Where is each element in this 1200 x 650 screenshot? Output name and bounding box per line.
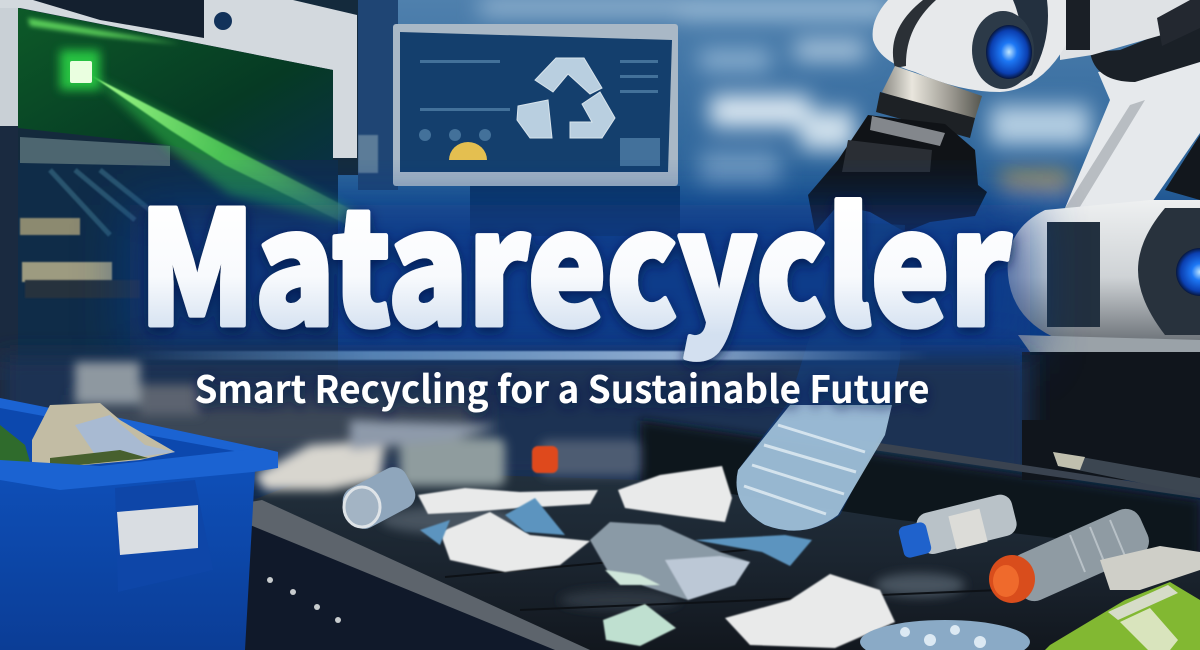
conveyor rail: [250, 500, 590, 650]
icon: green laser beam: [60, 50, 362, 228]
neck: [882, 66, 982, 128]
waste in bin: [0, 403, 175, 468]
laser machine: [0, 0, 398, 401]
wrist shell: [873, 0, 1066, 92]
blurred orange bottle cap: [532, 446, 558, 473]
held plastic bottle: [737, 222, 905, 531]
blurred background debris: [75, 362, 640, 490]
bin label: [117, 505, 198, 555]
conveyor side panel: [240, 515, 570, 650]
elbow: [1090, 18, 1200, 82]
belt reflections: [380, 506, 965, 610]
platform: [1018, 335, 1200, 358]
bin front rim: [0, 448, 278, 490]
recycling bin: [0, 398, 278, 650]
machine slot: [33, 0, 204, 38]
conveyor belt: [0, 355, 1200, 650]
machine knob: [214, 12, 232, 30]
upper arm: [1060, 0, 1200, 60]
joint: [1008, 200, 1200, 340]
title: Matarecycler: [139, 144, 1011, 371]
bottle: orange cap: [989, 504, 1154, 606]
bin far rim: [0, 398, 278, 456]
bin interior: [0, 406, 270, 470]
green bottle: [1045, 582, 1200, 650]
machine screen: [18, 8, 333, 190]
metal can: [338, 462, 420, 534]
gripper: [808, 115, 987, 232]
clutter on belt: [338, 462, 1200, 650]
clear bottle bottom: [860, 620, 1030, 650]
title rule: [130, 351, 930, 360]
monitor with recycling symbol: [393, 24, 680, 236]
crumpled paper pieces: [418, 466, 895, 648]
bin handle recess: [115, 480, 213, 592]
subtitle: Smart Recycling for a Sustainable Future: [194, 359, 930, 414]
lower arm: [1063, 60, 1200, 213]
crushed bottle: [590, 522, 750, 600]
blue scraps: [420, 498, 812, 566]
robot arm: [808, 0, 1200, 452]
paper corner: [1100, 546, 1200, 590]
bottle: blue cap: [898, 492, 1019, 559]
icon: recycling arrows: [517, 58, 615, 138]
band behind title: [130, 205, 1030, 355]
